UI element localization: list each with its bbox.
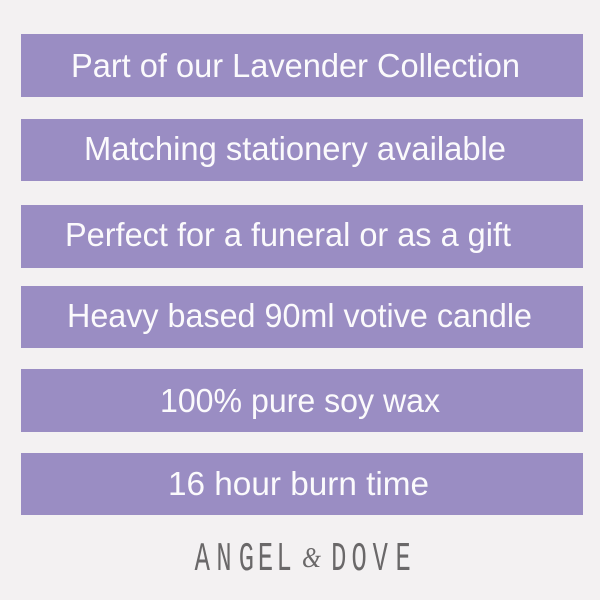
panel: votive candle: Heavy based 90ml votive candle	[67, 297, 532, 334]
panel: burn time: 16 hour burn time	[168, 465, 429, 502]
panel: lavender collection	[21, 34, 583, 97]
logo: Angel & Dove: DOVE	[331, 538, 411, 583]
panel: burn time	[21, 453, 583, 515]
panel: soy wax	[21, 369, 583, 432]
panel: votive candle	[21, 286, 583, 348]
panel: matching stationery	[21, 119, 583, 181]
panel: matching stationery: Matching stationery available	[84, 130, 506, 167]
panel: funeral or gift	[21, 205, 583, 268]
panel: lavender collection: Part of our Lavender Collection	[71, 47, 520, 84]
logo: Angel & Dove: &	[302, 542, 321, 574]
panel: soy wax: 100% pure soy wax	[160, 382, 440, 419]
logo: Angel & Dove	[195, 538, 411, 583]
panel: funeral or gift: Perfect for a funeral or as a gift	[65, 216, 511, 253]
logo: Angel & Dove: ANGEL	[195, 538, 292, 583]
